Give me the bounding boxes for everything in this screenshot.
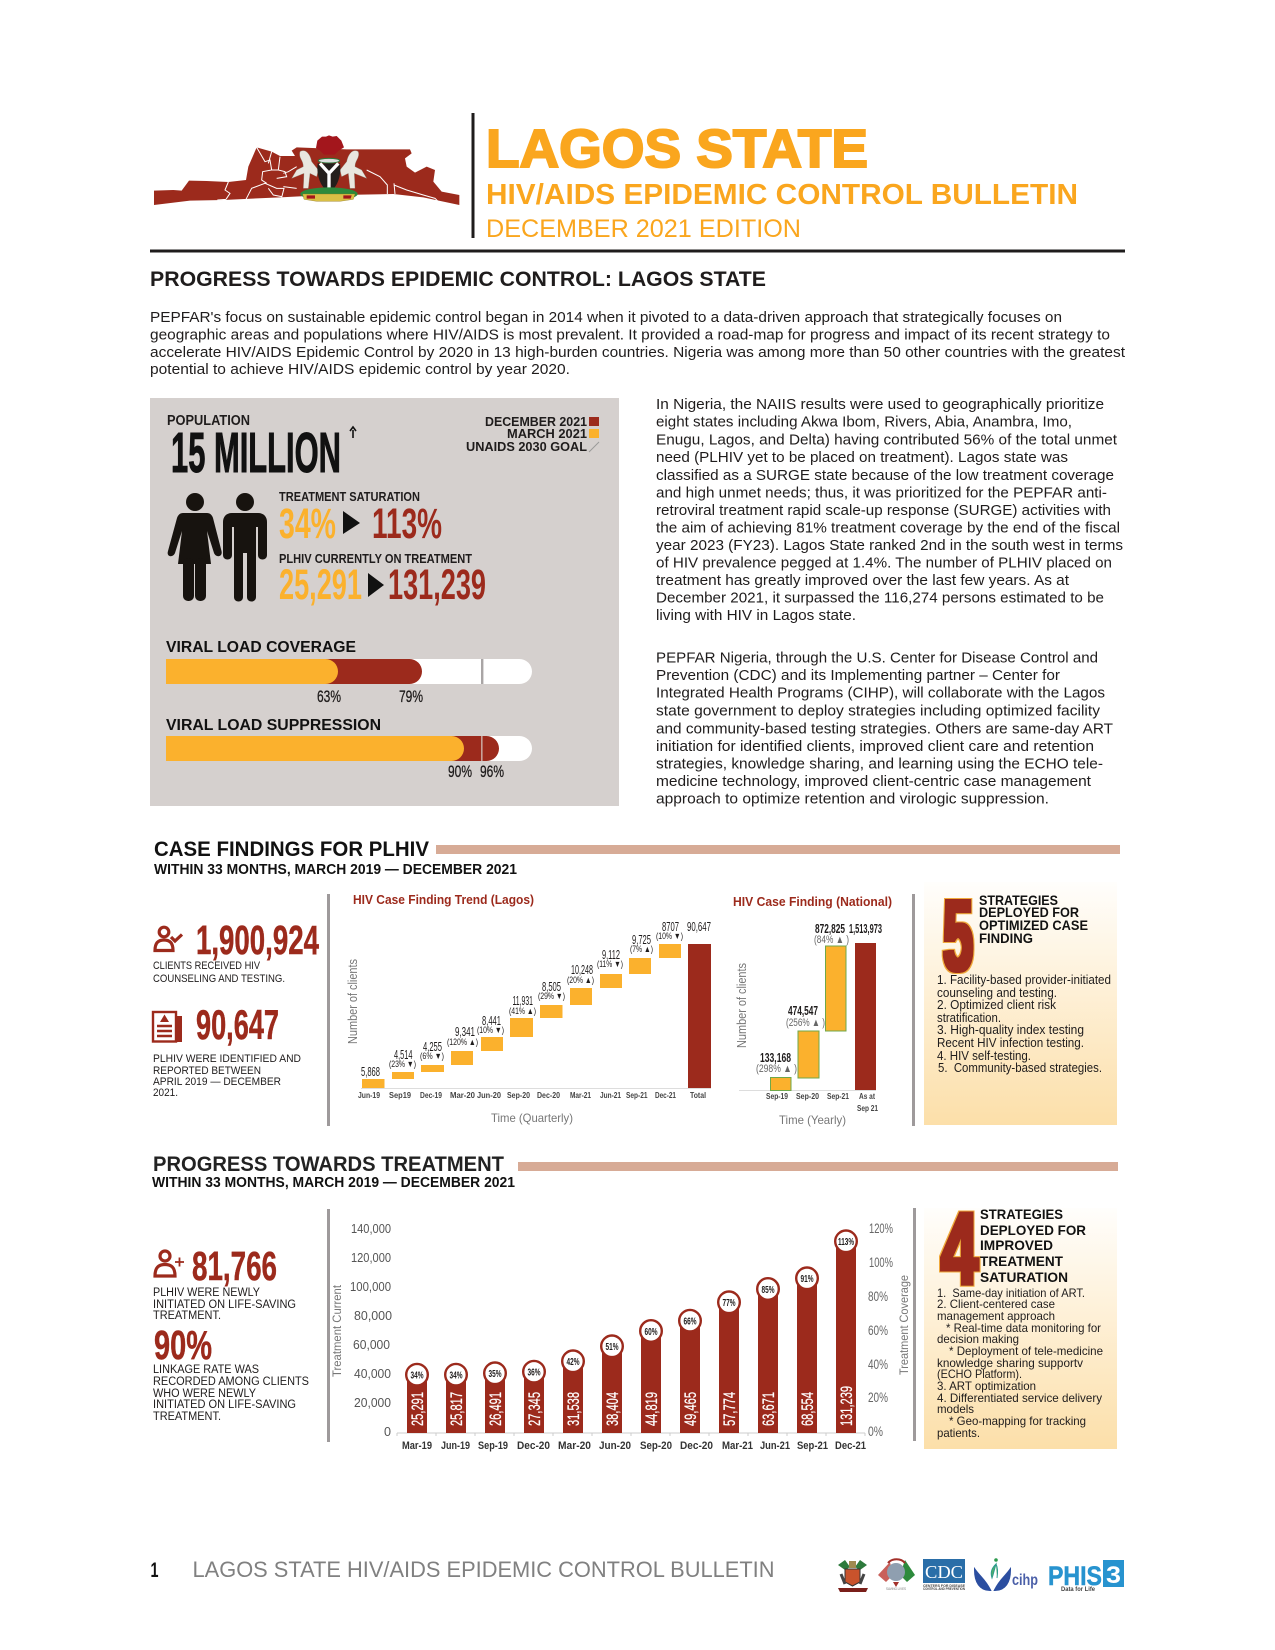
coverage percentages: 51% — [606, 1341, 619, 1353]
strategies heading: OPTIMIZED CASE — [979, 917, 1088, 933]
logo: US Nigeria flags seal: SAVING LIVES — [886, 1586, 906, 1591]
icon: person check — [155, 927, 182, 950]
logo: CDC: CENTERS FOR DISEASE — [923, 1584, 966, 1588]
chart: HIV case finding trend Lagos: HIV Case Finding Trend (Lagos) — [353, 892, 534, 907]
left y axis labels: 0 — [384, 1425, 391, 1439]
data labels: yearly values: 474,547 — [788, 1003, 818, 1018]
text block: PEPFAR Nigeria: approach to optimize retention and virologic suppression. — [656, 790, 1049, 807]
stat: clients tested — [153, 917, 319, 985]
strategies heading — [980, 1206, 1086, 1285]
right y axis labels: 20% — [868, 1389, 888, 1405]
data labels: yearly values — [756, 921, 882, 1075]
chart: HIV case finding national — [733, 894, 892, 1127]
data labels: quarterly values: 11,931 — [512, 993, 533, 1008]
stat: newly initiated: INITIATED ON LIFE-SAVING — [153, 1299, 296, 1311]
bar value labels: 25,291 — [408, 1392, 427, 1426]
text block: PEPFAR Nigeria — [656, 650, 1113, 807]
footer logos — [838, 1558, 1124, 1593]
coverage percentages: 91% — [800, 1273, 814, 1285]
left y axis labels — [350, 1222, 392, 1439]
stat: PLHIV identified: APRIL 2019 — DECEMBER — [153, 1076, 281, 1088]
x axis labels: quarters: Dec-20 — [537, 1090, 560, 1100]
legend: MARCH 2021 — [507, 426, 587, 441]
bar value labels: 49,465 — [681, 1392, 700, 1426]
intro paragraph: geographic areas and populations where HIV/AIDS is most prevalent. It provided a road-map for progress and impact of its recent strategy to — [150, 326, 1110, 344]
x axis labels: months: Mar-21 — [722, 1440, 753, 1452]
data labels: yearly values: 1,513,973 — [849, 921, 882, 936]
bars — [407, 1241, 856, 1433]
x axis labels: months: Dec-20 — [517, 1440, 550, 1452]
strategies list: * Real-time data monitoring for — [946, 1321, 1101, 1335]
intro paragraph: accelerate HIV/AIDS Epidemic Control by 2020 in 13 high-burden countries. Nigeria was among more than 50 other countries with the greatest — [150, 344, 1126, 361]
x axis labels: quarters: Dec-19 — [420, 1090, 442, 1100]
x axis labels: months: Mar-19 — [402, 1440, 432, 1452]
data labels: quarterly values: 8707 — [662, 919, 679, 934]
x axis labels: months: Sep-20 — [640, 1440, 672, 1452]
data labels: change percentages: (20% ▲) — [567, 975, 594, 985]
strategies list: Recent HIV infection testing. — [937, 1036, 1084, 1050]
stat: newly initiated: TREATMENT. — [153, 1310, 221, 1322]
stat: linkage rate: RECORDED AMONG CLIENTS — [153, 1376, 309, 1388]
section heading: case findings: WITHIN 33 MONTHS, MARCH 2019 — DECEMBER 2021 — [154, 862, 517, 878]
x axis labels: years: Sep-19 — [766, 1091, 788, 1101]
stat: PLHIV identified: 2021. — [153, 1087, 178, 1099]
legend: UNAIDS 2030 GOAL — [466, 439, 587, 454]
coverage percentages — [410, 1236, 854, 1382]
viral load coverage bar: 63% — [317, 687, 341, 706]
text block: PEPFAR Nigeria: PEPFAR Nigeria, through the U.S. Center for Disease Control and — [656, 650, 1098, 667]
strategies list: 2. Client-centered case — [937, 1297, 1055, 1311]
title block — [486, 119, 1078, 243]
x axis labels: months: Sep-21 — [797, 1440, 828, 1452]
data labels: quarterly values: 4,514 — [394, 1047, 412, 1062]
text block: Nigeria NAIIS results: classified as a SURGE state because of the low treatment coverage — [656, 467, 1114, 484]
right y axis labels: 100% — [869, 1254, 893, 1270]
text block: PEPFAR Nigeria: and community-based testing strategies. Others are same-day ART — [656, 720, 1113, 737]
text block: Nigeria NAIIS results: the aim of achieving 81% treatment coverage by the end of the fiscal — [656, 519, 1120, 536]
text block: Nigeria NAIIS results: retroviral treatment rapid scale-up response (SURGE) activities with — [656, 502, 1111, 519]
strategies list: models — [937, 1402, 974, 1416]
bar value labels: 27,345 — [525, 1392, 544, 1426]
bar value labels: 31,538 — [564, 1392, 583, 1426]
stat: PLHIV identified — [153, 1001, 301, 1099]
chart: HIV case finding national: HIV Case Finding (National) — [733, 894, 892, 909]
bar value labels: 26,491 — [486, 1392, 505, 1426]
viral load suppression bar — [166, 717, 532, 781]
bar value labels: 57,774 — [720, 1392, 739, 1426]
strategies list: (ECHO Platform). — [937, 1367, 1022, 1381]
strategies list: stratification. — [937, 1011, 1001, 1025]
x axis labels: quarters: Mar-20 — [450, 1090, 475, 1100]
x axis labels: years: As at — [859, 1091, 875, 1101]
stat: newly initiated: PLHIV WERE NEWLY — [153, 1287, 260, 1299]
title: LAGOS STATE — [486, 119, 868, 179]
data labels: change percentages: (6% ▼) — [420, 1051, 444, 1061]
stat: newly initiated: 81,766 — [192, 1243, 277, 1289]
PLHIV on treatment — [279, 552, 486, 609]
text block: Nigeria NAIIS results: need (PLHIV yet to be placed on treatment). Lagos state was — [656, 449, 1068, 466]
right y axis labels: 0% — [868, 1423, 883, 1439]
coverage percentages: 113% — [838, 1236, 854, 1248]
bar value labels: 44,819 — [642, 1392, 661, 1426]
icon: person plus — [155, 1251, 184, 1276]
data labels: change percentages: (29% ▼) — [538, 991, 565, 1001]
data labels: quarterly values: 10,248 — [571, 962, 593, 977]
population label: POPULATION — [167, 413, 250, 429]
icon: up arrow — [350, 427, 356, 438]
x axis labels: quarters: Sep-21 — [626, 1090, 648, 1100]
data labels: yearly values: 872,825 — [815, 921, 845, 936]
strategies heading: TREATMENT — [980, 1253, 1063, 1269]
stat: linkage rate: INITIATED ON LIFE-SAVING — [153, 1399, 296, 1411]
treatment saturation: 113% — [372, 500, 442, 548]
chart: HIV case finding trend Lagos: Time (Quarterly) — [491, 1111, 573, 1125]
strategies list: 1. Facility-based provider-initiated — [937, 973, 1111, 987]
strategies list: * Deployment of tele-medicine — [949, 1344, 1103, 1358]
logo: CDC: CONTROL AND PREVENTION — [923, 1587, 965, 1591]
logo: cihp — [975, 1558, 1038, 1590]
stat: linkage rate: 90% — [154, 1322, 212, 1368]
data labels: yearly values: (256% ▲ ) — [786, 1017, 825, 1029]
population value: 15 MILLION — [171, 421, 341, 485]
x axis labels: years: Sep-21 — [827, 1091, 849, 1101]
stat: linkage rate: WHO WERE NEWLY — [153, 1388, 256, 1400]
logo: CDC: CDC — [925, 1562, 963, 1582]
logo: PHIS3: PHIS — [1048, 1561, 1102, 1591]
treatment saturation: TREATMENT SATURATION — [279, 490, 420, 504]
coverage percentages: 36% — [528, 1366, 541, 1378]
text block: PEPFAR Nigeria: initiation for identified clients, improved client care and retention — [656, 738, 1094, 755]
viral load suppression bar: 90% — [448, 762, 472, 781]
coverage percentages: 60% — [644, 1326, 658, 1338]
data labels: change percentages: (120% ▲) — [447, 1037, 478, 1047]
x axis labels: quarters: Jun-20 — [477, 1090, 501, 1100]
logo: cihp: cihp — [1012, 1572, 1038, 1589]
strategies heading: DEPLOYED FOR — [980, 1222, 1086, 1238]
right y axis labels: 80% — [868, 1288, 888, 1304]
x axis labels: quarters: Total — [690, 1090, 706, 1100]
chart: treatment current and coverage: Treatment Current — [330, 1284, 344, 1377]
legend: DECEMBER 2021 — [485, 414, 587, 429]
section heading: progress towards treatment — [152, 1152, 1118, 1191]
strategies list: 2. Optimized client risk — [937, 998, 1057, 1012]
data labels: yearly values: 133,168 — [760, 1050, 791, 1065]
viral load coverage bar: VIRAL LOAD COVERAGE — [166, 639, 356, 656]
data labels: change percentages: (10% ▼) — [656, 931, 683, 941]
strategies list: counseling and testing. — [937, 986, 1057, 1000]
strategies heading — [979, 892, 1088, 946]
strategies list: 1. Same-day initiation of ART. — [937, 1286, 1085, 1300]
x axis labels: years: Sep 21 — [857, 1103, 878, 1113]
strategies list: 3. ART optimization — [937, 1379, 1036, 1393]
x axis labels: months: Mar-20 — [558, 1440, 591, 1452]
x axis labels: months — [402, 1440, 866, 1452]
logo: PHIS3: 3 — [1106, 1562, 1121, 1589]
footer: page number and title: LAGOS STATE HIV/AIDS EPIDEMIC CONTROL BULLETIN — [192, 1557, 774, 1582]
text block: Nigeria NAIIS results: treatment has greatly improved over the last few years. As at — [656, 572, 1070, 589]
text block: Nigeria NAIIS results — [656, 396, 1123, 624]
strategies heading: STRATEGIES — [979, 892, 1058, 908]
coverage bubbles — [406, 1230, 857, 1385]
data labels: yearly values: (298% ▲ ) — [756, 1063, 797, 1075]
left y axis labels: 140,000 — [351, 1222, 391, 1236]
x axis labels: years: Sep-20 — [796, 1091, 819, 1101]
data labels: quarterly values: 8,441 — [482, 1013, 501, 1028]
strategies heading: SATURATION — [980, 1269, 1068, 1285]
data labels: quarterly values: 4,255 — [423, 1039, 442, 1054]
coverage percentages: 77% — [722, 1297, 736, 1309]
subtitle: HIV/AIDS EPIDEMIC CONTROL BULLETIN — [486, 179, 1078, 211]
strategies list: 5. Community-based strategies. — [938, 1061, 1102, 1075]
strategies list: knowledge sharing supportv — [937, 1356, 1083, 1370]
data labels: quarterly values: 9,341 — [455, 1024, 475, 1039]
x axis labels: years — [766, 1091, 878, 1113]
viral load coverage bar — [166, 639, 532, 706]
strategies list: decision making — [937, 1332, 1019, 1346]
data labels: change percentages: (7% ▲) — [630, 944, 653, 954]
text block: Nigeria NAIIS results: of HIV prevalence pegged at 1.4%. The number of PLHIV placed on — [656, 554, 1112, 571]
big numeral 4: 4 — [941, 1192, 978, 1306]
chart: HIV case finding national: Number of clients — [735, 963, 749, 1048]
stat: clients tested: CLIENTS RECEIVED HIV — [153, 960, 261, 972]
x axis labels: months: Jun-19 — [441, 1440, 470, 1452]
strategies list: 4. HIV self-testing. — [937, 1049, 1031, 1063]
icon: document checklist — [153, 1012, 182, 1042]
x axis labels: quarters: Sep19 — [389, 1090, 411, 1100]
text block: Nigeria NAIIS results: year 2023 (FY23). Lagos State ranked 2nd in the south west in terms — [656, 537, 1123, 554]
treatment saturation — [279, 490, 442, 548]
viral load coverage bar: 79% — [399, 687, 423, 706]
PLHIV on treatment: PLHIV CURRENTLY ON TREATMENT — [279, 552, 472, 566]
x axis labels: quarters: Mar-21 — [570, 1090, 591, 1100]
x axis labels: quarters — [358, 1090, 706, 1100]
strategies list: management approach — [937, 1309, 1055, 1323]
bar value labels: 68,554 — [798, 1392, 817, 1426]
data labels: change percentages: (10% ▼) — [477, 1025, 504, 1035]
legend — [466, 414, 599, 454]
stat: linkage rate: LINKAGE RATE WAS — [153, 1364, 259, 1376]
x axis labels: months: Dec-21 — [835, 1440, 866, 1452]
strategies heading: IMPROVED — [980, 1237, 1053, 1253]
strategies list: 4. Differentiated service delivery — [937, 1391, 1102, 1405]
bar value labels: 131,239 — [837, 1386, 856, 1426]
strategies list — [937, 973, 1111, 1075]
x axis labels: quarters: Jun-19 — [358, 1090, 380, 1100]
chart: HIV case finding trend Lagos: Number of clients — [346, 959, 360, 1044]
left y axis labels: 20,000 — [354, 1396, 391, 1410]
x axis labels: months: Jun-21 — [760, 1440, 790, 1452]
header divider vertical — [472, 113, 474, 238]
coverage percentages: 34% — [450, 1370, 463, 1382]
x axis labels: months: Jun-20 — [599, 1440, 631, 1452]
right y axis labels: 40% — [868, 1356, 888, 1372]
text block: Nigeria NAIIS results: eight states including Akwa Ibom, Rivers, Abia, Anambra, Imo, — [656, 414, 1072, 431]
panel: 5 strategies — [924, 880, 1117, 1125]
left y axis labels: 60,000 — [353, 1338, 390, 1352]
big numeral 5: 5 — [943, 880, 973, 992]
data labels: quarterly values: 8,505 — [542, 979, 561, 994]
data labels: quarterly values: 5,868 — [361, 1064, 380, 1079]
text block: PEPFAR Nigeria: Prevention (CDC) and its Implementing partner – Center for — [656, 667, 1060, 684]
data labels: quarterly values: 90,647 — [687, 919, 711, 934]
chart: HIV case finding national: Time (Yearly) — [779, 1113, 846, 1127]
strategies list: * Geo-mapping for tracking — [949, 1414, 1086, 1428]
x axis labels: months: Sep-19 — [478, 1440, 508, 1452]
data labels: change percentages — [389, 931, 683, 1069]
data labels: change percentages: (11% ▼) — [597, 959, 623, 969]
left y axis labels: 80,000 — [354, 1309, 392, 1323]
data labels: change percentages: (41% ▲) — [509, 1006, 536, 1016]
coverage percentages: 66% — [684, 1316, 697, 1328]
viral load suppression bar: VIRAL LOAD SUPPRESSION — [166, 717, 381, 734]
stat: linkage rate — [153, 1322, 309, 1423]
strategies list: patients. — [937, 1426, 980, 1440]
data labels: yearly values: (84% ▲ ) — [814, 934, 849, 946]
x axis labels: quarters: Sep-20 — [507, 1090, 530, 1100]
header: map of Lagos with coat of arms — [154, 135, 459, 205]
strategies heading: STRATEGIES — [980, 1206, 1063, 1222]
stat: linkage rate: TREATMENT. — [153, 1411, 221, 1423]
logo: CDC — [923, 1559, 966, 1591]
panel: 4 strategies — [924, 1192, 1117, 1449]
x axis labels: months: Dec-20 — [680, 1440, 713, 1452]
text block: PEPFAR Nigeria: Integrated Health Programs (CIHP), will collaborate with the Lagos — [656, 685, 1105, 702]
stat: newly initiated — [153, 1243, 296, 1322]
PLHIV on treatment: 131,239 — [388, 561, 486, 609]
section heading: progress towards treatment: WITHIN 33 MONTHS, MARCH 2019 — DECEMBER 2021 — [152, 1175, 515, 1191]
bar value labels: 63,671 — [759, 1392, 778, 1426]
stat: PLHIV identified: PLHIV WERE IDENTIFIED AND — [153, 1053, 301, 1065]
bar value labels: 25,817 — [447, 1392, 466, 1426]
text block: Nigeria NAIIS results: Enugu, Lagos, and Delta) having contributed 56% of the total unmet — [656, 431, 1118, 448]
strategies heading: DEPLOYED FOR — [979, 904, 1079, 920]
bar value labels — [408, 1386, 856, 1426]
stat: PLHIV identified: 90,647 — [196, 1001, 279, 1048]
chart: treatment current and coverage: Treatment Coverage — [897, 1275, 911, 1375]
edition: DECEMBER 2021 EDITION — [486, 215, 801, 243]
text block: Nigeria NAIIS results: and high unmet needs; thus, it was prioritized for the PEPFAR anti- — [656, 484, 1107, 501]
section heading: progress towards treatment: PROGRESS TOWARDS TREATMENT — [153, 1152, 504, 1176]
stat: clients tested: COUNSELING AND TESTING. — [153, 973, 285, 985]
bar value labels: 38,404 — [603, 1392, 622, 1426]
intro paragraph: PEPFAR's focus on sustainable epidemic control began in 2014 when it pivoted to a data-driven approach that strategically focuses on — [150, 309, 1062, 326]
text block: PEPFAR Nigeria: state government to deploy strategies including optimized facility — [656, 702, 1101, 719]
x axis labels: quarters: Jun-21 — [600, 1090, 621, 1100]
logo: US Nigeria flags seal — [878, 1559, 915, 1591]
panel: key statistics — [150, 398, 619, 806]
coverage percentages: 34% — [410, 1370, 424, 1382]
data labels: quarterly values: 9,112 — [602, 947, 620, 962]
data labels: quarterly values — [361, 919, 711, 1079]
strategies heading: FINDING — [979, 930, 1033, 946]
strategies list — [937, 1286, 1103, 1440]
logo: PHIS3: Data for Life — [1061, 1586, 1095, 1593]
coverage percentages: 85% — [762, 1284, 775, 1296]
right y axis labels: 120% — [869, 1220, 893, 1236]
footer: page number and title: 1 — [150, 1558, 159, 1582]
icon: woman and man — [168, 493, 267, 602]
logo: Lagos crest — [838, 1560, 868, 1592]
text block: PEPFAR Nigeria: strategies, knowledge sharing, and learning using the ECHO tele- — [656, 755, 1103, 772]
left y axis labels: 120,000 — [351, 1251, 391, 1265]
text block: Nigeria NAIIS results: living with HIV in Lagos state. — [656, 607, 856, 624]
left y axis labels: 40,000 — [354, 1367, 391, 1381]
right y axis labels — [868, 1220, 893, 1439]
coverage percentages: 35% — [488, 1368, 502, 1380]
text block: Nigeria NAIIS results: December 2021, it surpassed the 116,274 persons estimated to be — [656, 590, 1104, 607]
right y axis labels: 60% — [868, 1322, 888, 1338]
left y axis labels: 100,000 — [350, 1280, 391, 1294]
intro paragraph: potential to achieve HIV/AIDS epidemic control by year 2020. — [150, 361, 570, 378]
coverage percentages: 42% — [566, 1356, 580, 1368]
data labels: quarterly values: 9,725 — [632, 932, 651, 947]
text block: PEPFAR Nigeria: medicine technology, improved client-centric case management — [656, 773, 1092, 790]
PLHIV on treatment: 25,291 — [279, 561, 362, 609]
stat: PLHIV identified: REPORTED BETWEEN — [153, 1065, 261, 1077]
section heading: case findings: CASE FINDINGS FOR PLHIV — [154, 837, 430, 861]
intro paragraph — [150, 309, 1126, 378]
x axis labels: quarters: Dec-21 — [655, 1090, 676, 1100]
text block: Nigeria NAIIS results: In Nigeria, the NAIIS results were used to geographically prioritize — [656, 396, 1104, 413]
data labels: change percentages: (23% ▼) — [389, 1059, 416, 1069]
viral load suppression bar: 96% — [480, 762, 504, 781]
strategies list: 3. High-quality index testing — [937, 1023, 1084, 1037]
chart: treatment current and coverage — [330, 1220, 911, 1452]
treatment saturation: 34% — [279, 500, 336, 548]
section heading: case findings — [154, 837, 1120, 878]
stat: clients tested: 1,900,924 — [196, 917, 319, 963]
chart: HIV case finding trend Lagos — [346, 892, 711, 1125]
heading: progress towards epidemic control: PROGRESS TOWARDS EPIDEMIC CONTROL: LAGOS STATE — [150, 267, 766, 291]
